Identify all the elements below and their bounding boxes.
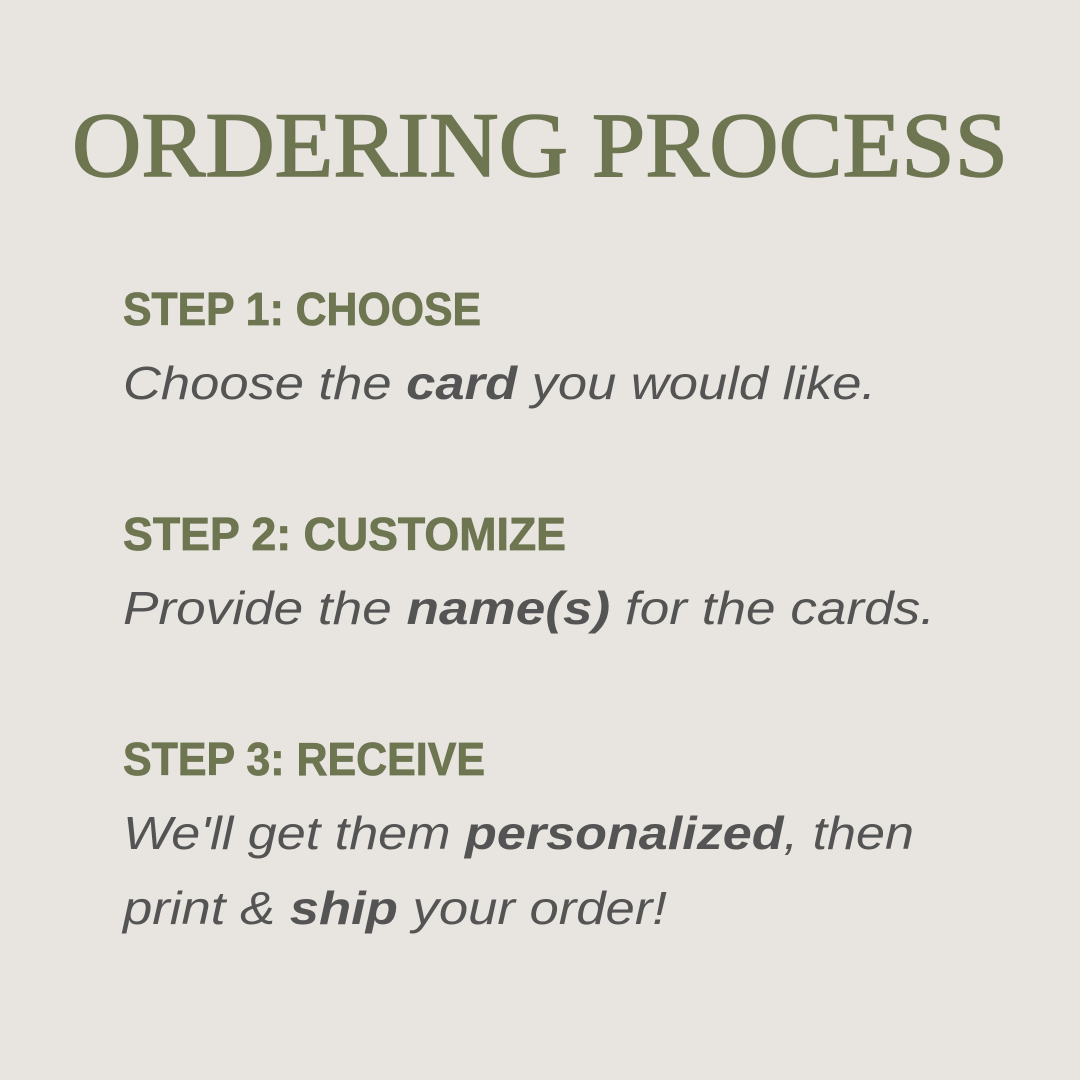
- step 2 block: [123, 508, 935, 634]
- step 1 heading: STEP 1: CHOOSE: [123, 283, 481, 335]
- step 2 description: Provide the name(s) for the cards.: [123, 582, 935, 634]
- step 3 heading: STEP 3: RECEIVE: [123, 733, 485, 785]
- step 1 description: Choose the card you would like.: [123, 357, 876, 409]
- step 3 block: [121, 733, 914, 934]
- step 2 heading: STEP 2: CUSTOMIZE: [123, 508, 566, 560]
- step 3 description line 1: We'll get them personalized , then: [123, 807, 914, 859]
- step 1 block: [123, 283, 876, 409]
- step 3 description line 2: print & ship your order!: [121, 882, 667, 934]
- title: ORDERING PROCESS: [72, 94, 1008, 196]
